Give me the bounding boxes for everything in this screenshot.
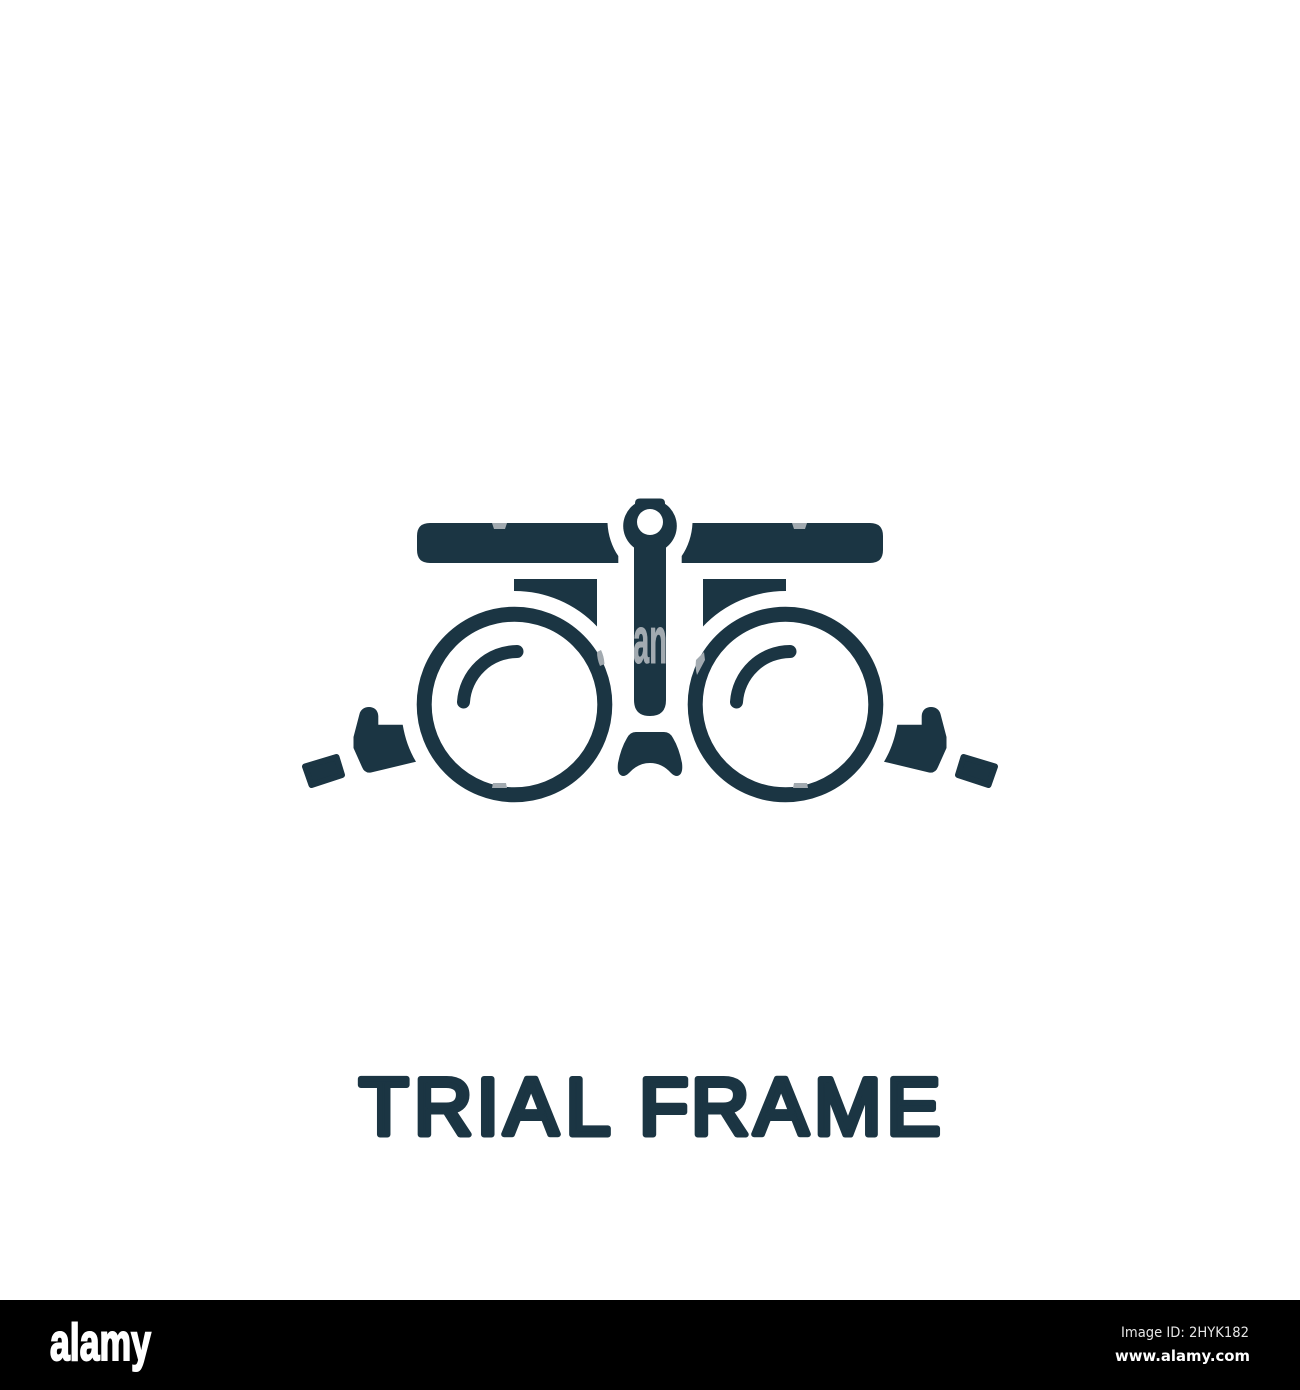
left top bar xyxy=(417,523,618,563)
infographic canvas xyxy=(0,498,1300,1390)
website: www.alamy.com xyxy=(1115,1347,1250,1365)
left temple tip xyxy=(305,757,342,785)
right lens xyxy=(695,614,876,795)
right top bar xyxy=(682,523,883,563)
right temple tip xyxy=(958,757,995,785)
image id: Image ID: 2HYK182 xyxy=(1121,1325,1249,1341)
left lens xyxy=(424,614,605,795)
footer band xyxy=(0,1300,1300,1390)
right lens support xyxy=(703,579,786,626)
right temple grip xyxy=(884,707,946,773)
watermark fragments on icon: an xyxy=(633,603,667,677)
left lens support xyxy=(514,579,597,626)
title word 2: FRAME xyxy=(639,1062,941,1152)
left temple grip xyxy=(354,707,416,773)
title word 1: TRIAL xyxy=(359,1062,611,1152)
title xyxy=(359,1062,941,1152)
nose pad xyxy=(618,732,682,776)
logo: alamy xyxy=(50,1314,151,1372)
icon: trial frame xyxy=(305,498,995,795)
watermark fragments on icon xyxy=(492,523,808,788)
central pivot arm xyxy=(623,498,677,716)
